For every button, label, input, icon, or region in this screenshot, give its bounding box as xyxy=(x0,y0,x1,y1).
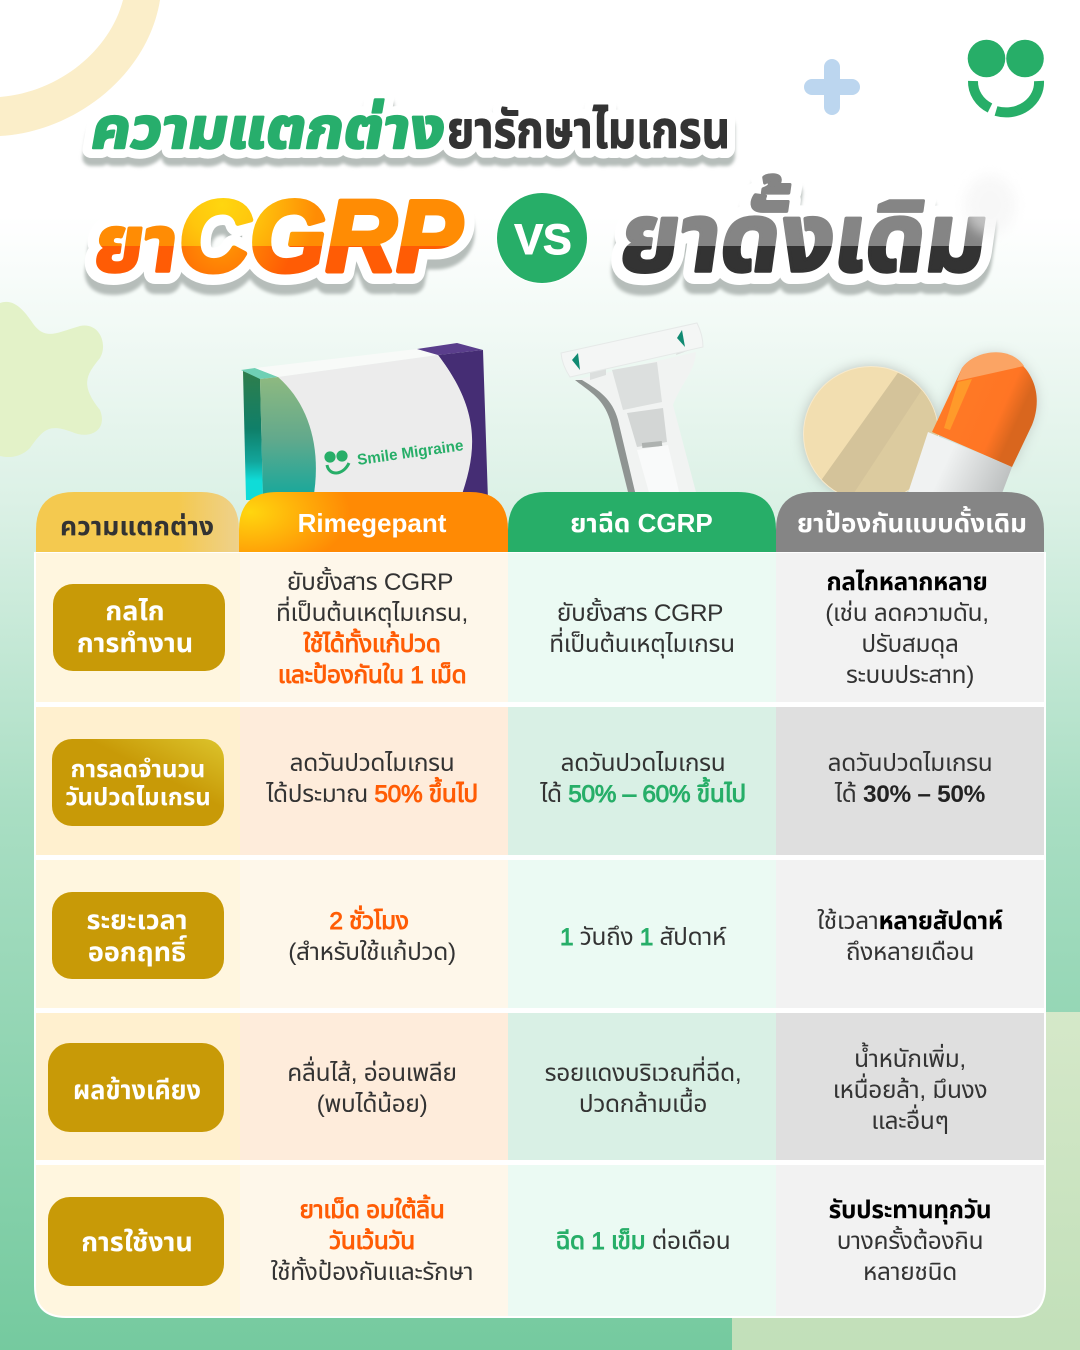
image: medicine box: Smile Migraine xyxy=(356,437,465,469)
title line 2: ยา CGRP: CGRP xyxy=(179,181,463,293)
cell: rimegepant mechanism: และป้องกันใน 1 เม็ด xyxy=(278,661,466,689)
label: กลไกการทำงาน: กลไก xyxy=(105,596,165,626)
label: ผลข้างเคียง xyxy=(48,1043,224,1132)
title line 2: ยาดั้งเดิม: ยาดั้งเดิม xyxy=(614,174,997,292)
cell: รับประทานทุกวัน xyxy=(829,1197,991,1225)
row 1: mechanism xyxy=(36,553,1044,702)
cell: rimegepant mechanism: ยับยั้งสาร CGRP xyxy=(287,566,453,596)
vs badge: VS xyxy=(514,216,572,264)
image: pills xyxy=(800,352,1037,502)
title line 1: ยารักษาไมเกรน xyxy=(447,110,730,168)
cell xyxy=(539,750,746,808)
cell xyxy=(833,1042,987,1135)
title line 1: ความแตกต่าง xyxy=(87,97,451,161)
cell: น้ำหนักเพิ่ม, xyxy=(854,1042,966,1073)
title line 2: ยา CGRP: CGRP xyxy=(179,181,463,293)
cell: คลื่นไส้, อ่อนเพลีย xyxy=(287,1056,457,1087)
cell xyxy=(288,905,456,966)
title line 1 xyxy=(87,97,730,169)
cell: เหนื่อยล้า, มึนงง xyxy=(833,1073,987,1104)
image: medicine box xyxy=(241,343,488,500)
cell: ลดวันปวดไมเกรน xyxy=(828,750,992,777)
label: การใช้งาน xyxy=(48,1197,224,1286)
cell: ถึงหลายเดือน xyxy=(846,939,974,966)
header: injection CGRP: ยาฉีด CGRP xyxy=(570,508,713,538)
row 2: reduction xyxy=(36,707,1044,855)
cell: injection mechanism: ยับยั้งสาร CGRP xyxy=(557,597,723,627)
title line 2: ยาดั้งเดิม: ยาดั้งเดิม xyxy=(614,174,997,292)
cell: ปวดกล้ามเนื้อ xyxy=(579,1087,707,1118)
cell: ได้ 50% – 60% ขึ้นไป xyxy=(539,777,746,808)
label: กลไกการทำงาน: การทำงาน xyxy=(77,628,193,658)
label: ระยะเวลาออกฤทธิ์: ระยะเวลา xyxy=(86,905,188,935)
title line 1: ยารักษาไมเกรน xyxy=(447,102,730,160)
cell: (พบได้น้อย) xyxy=(317,1091,427,1118)
cell: ได้ประมาณ 50% ขึ้นไป xyxy=(265,777,478,808)
cell: traditional mechanism: (เช่น ลดความดัน, xyxy=(825,599,989,627)
cell xyxy=(545,1056,741,1118)
cell: injection mechanism: ที่เป็นต้นเหตุไมเกรน xyxy=(549,627,735,659)
cell: (สำหรับใช้แก้ปวด) xyxy=(288,939,456,966)
decorative green blob left xyxy=(0,302,103,457)
label: ผลข้างเคียง: ผลข้างเคียง xyxy=(73,1075,201,1105)
cell: rimegepant mechanism: ใช้ได้ทั้งแก้ปวด xyxy=(303,628,441,658)
cell: ลดวันปวดไมเกรน xyxy=(561,750,725,777)
cell xyxy=(829,1197,991,1286)
row 5: usage xyxy=(36,1165,1044,1316)
label: ระยะเวลาออกฤทธิ์ xyxy=(52,892,224,979)
icon: plus xyxy=(804,59,860,115)
decorative cream ring top left xyxy=(0,0,160,136)
cell: traditional mechanism: ปรับสมดุล xyxy=(861,631,959,659)
cell: ยาเม็ด อมใต้ลิ้น xyxy=(300,1194,444,1224)
title line 2: ยาดั้งเดิม: ยาดั้งเดิม xyxy=(614,174,997,292)
cell: ใช้เวลาหลายสัปดาห์ xyxy=(817,908,1003,935)
title line 2: ยา CGRP xyxy=(83,198,476,297)
cell xyxy=(265,750,478,808)
label: ระยะเวลาออกฤทธิ์: ออกฤทธิ์ xyxy=(88,935,188,967)
cell: ใช้ทั้งป้องกันและรักษา xyxy=(271,1256,473,1286)
cell: วันเว้นวัน xyxy=(329,1228,415,1255)
title line 2: ยาดั้งเดิม: ยาดั้งเดิม xyxy=(614,184,997,302)
label: การลดจำนวนวันปวด: การลดจำนวน xyxy=(71,756,205,783)
label: กลไกการทำงาน xyxy=(53,584,225,671)
cell: และอื่นๆ xyxy=(871,1104,949,1135)
cell: rimegepant mechanism: ที่เป็นต้นเหตุไมเกรน, xyxy=(276,596,468,628)
title line 1: ความแตกต่าง xyxy=(87,105,451,169)
cell: ฉีด 1 เข็ม ต่อเดือน xyxy=(556,1227,730,1255)
row 3: onset xyxy=(36,860,1044,1008)
cell: injection mechanism xyxy=(549,597,735,659)
header: injection CGRP xyxy=(508,492,776,552)
row 4: side effects xyxy=(36,1013,1044,1160)
cell: 1 วันถึง 1 สัปดาห์ xyxy=(560,924,727,951)
cell: รอยแดงบริเวณที่ฉีด, xyxy=(545,1056,741,1087)
cell xyxy=(287,1056,457,1118)
cell xyxy=(271,1194,473,1286)
header: traditional xyxy=(776,492,1044,552)
cell: traditional mechanism: กลไกหลากหลาย xyxy=(826,569,988,596)
cell: หลายชนิด xyxy=(863,1259,957,1286)
title line 2: ยา CGRP: CGRP xyxy=(179,191,463,303)
cell: traditional mechanism: ระบบประสาท) xyxy=(846,662,974,689)
vs badge xyxy=(496,192,588,284)
cell: traditional mechanism xyxy=(825,569,989,689)
cell xyxy=(817,908,1003,966)
title line 2: ยา CGRP: ยา xyxy=(90,200,184,288)
image: injector device xyxy=(561,323,703,496)
cell: บางครั้งต้องกิน xyxy=(837,1225,983,1255)
cell xyxy=(828,750,992,808)
title line 2: ยา CGRP: CGRP xyxy=(179,181,463,293)
header: Rimegepant xyxy=(239,492,508,552)
title line 2: ยา CGRP: ยา xyxy=(90,200,184,288)
cell: ได้ 30% – 50% xyxy=(834,781,986,808)
cell: 2 ชั่วโมง xyxy=(329,905,409,935)
header: ความแตกต่าง xyxy=(36,492,239,552)
label: การลดจำนวนวันปวด xyxy=(52,739,224,826)
header: traditional: ยาป้องกันแบบดั้งเดิม xyxy=(797,506,1027,538)
cell: rimegepant mechanism xyxy=(276,566,468,689)
header: ความแตกต่าง: ความแตกต่าง xyxy=(60,511,214,541)
title line 2: ยา CGRP: ยา xyxy=(90,200,184,288)
decorative shape bottom right xyxy=(732,1012,1080,1350)
title line 1: ความแตกต่าง xyxy=(87,97,451,161)
label: การลดจำนวนวันปวด: วันปวดไมเกรน xyxy=(65,784,211,811)
title line 1: ยารักษาไมเกรน xyxy=(447,102,730,160)
header: Rimegepant: Rimegepant xyxy=(298,508,447,538)
label: การใช้งาน: การใช้งาน xyxy=(81,1227,193,1257)
icon: smile logo xyxy=(968,40,1044,112)
table container xyxy=(34,552,1046,1318)
title line 2: ยา CGRP: ยา xyxy=(90,210,184,298)
cell: ลดวันปวดไมเกรน xyxy=(290,750,454,777)
